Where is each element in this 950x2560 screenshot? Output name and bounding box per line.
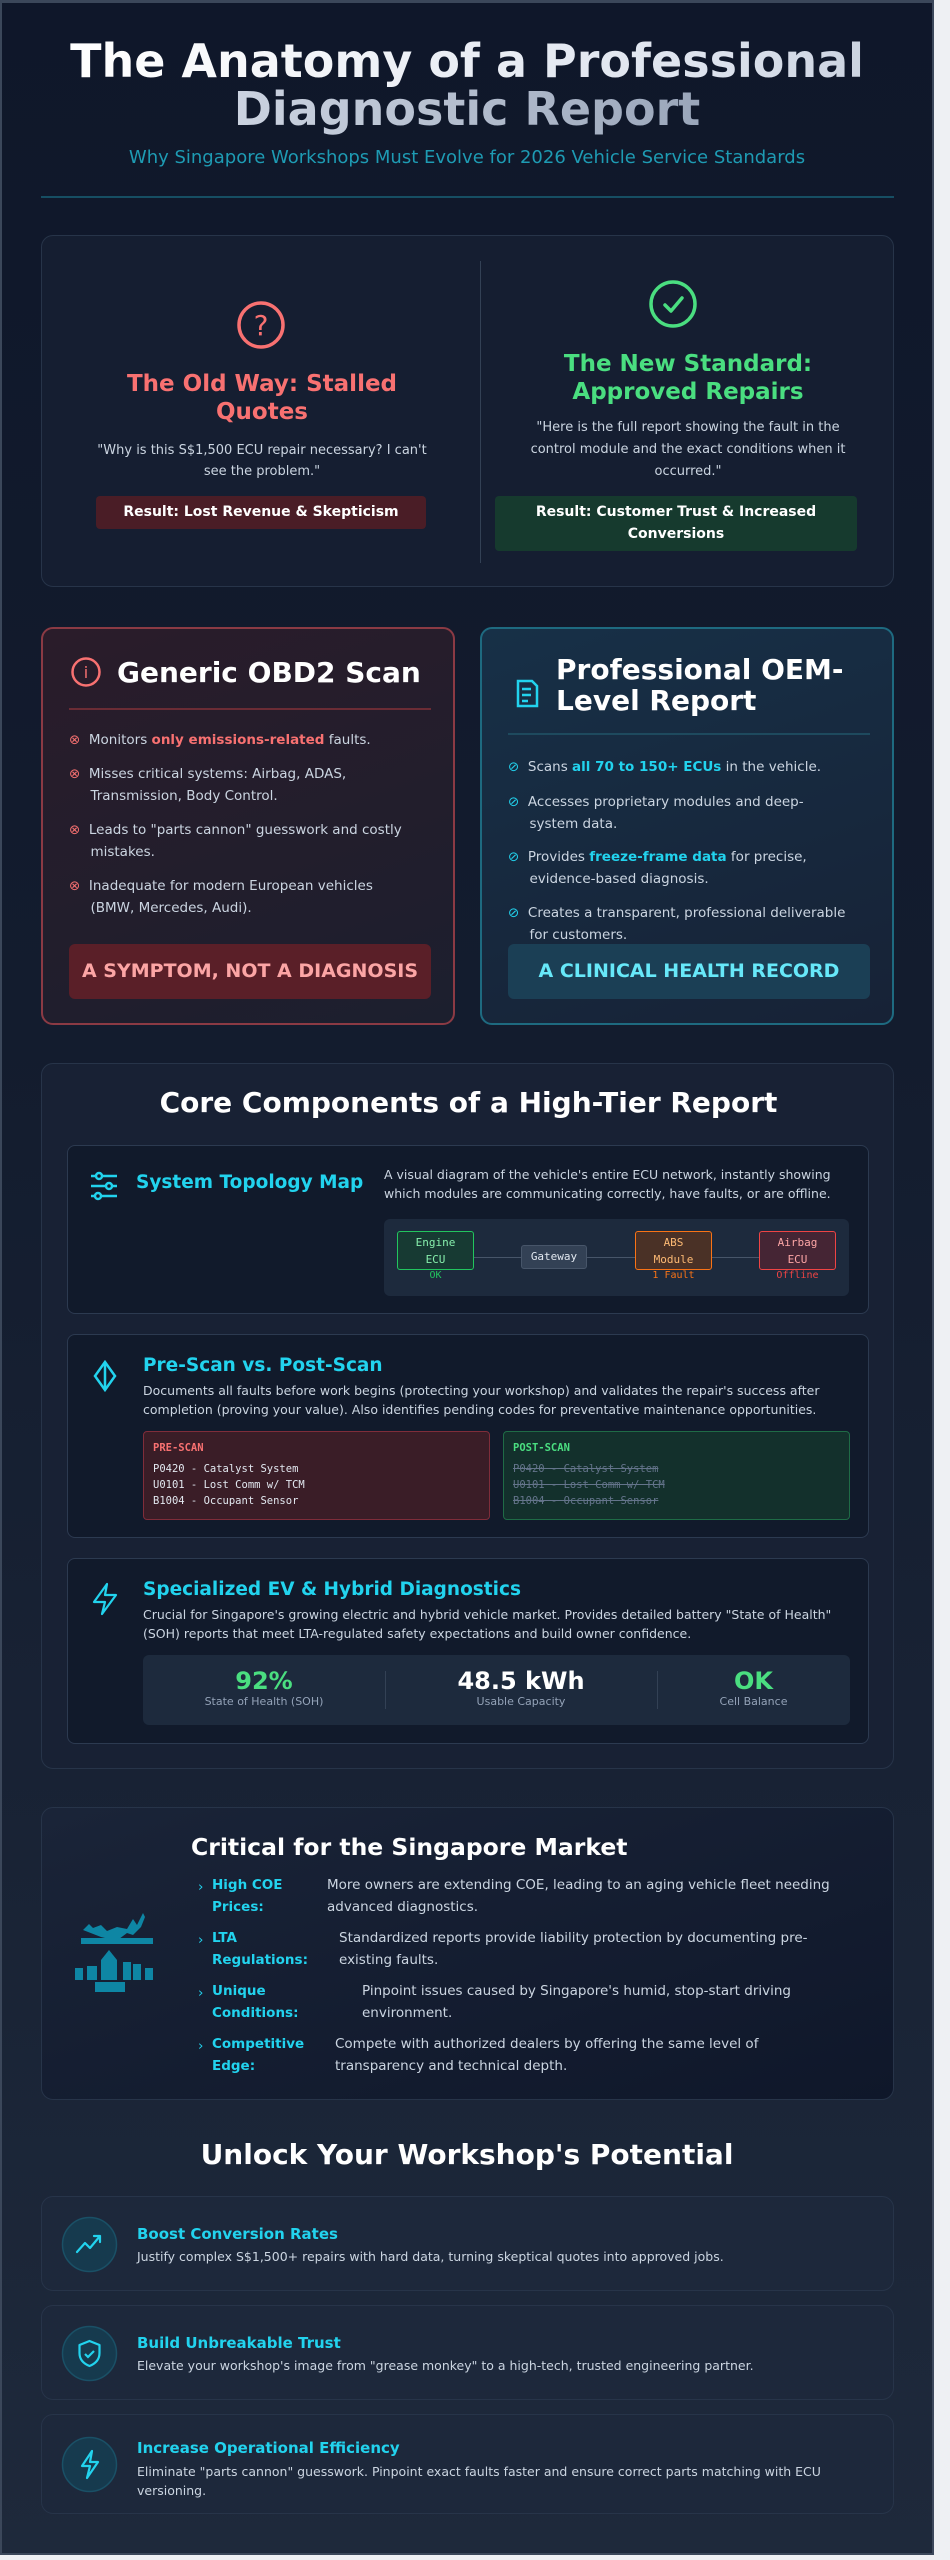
new standard column [495,280,857,551]
bullet list: capabilities: evidence-based diagnosis. [529,871,709,887]
stat: cell balance: Cell Balance [720,1695,787,1708]
item: unique conditions: Pinpoint issues caused by Singapore's humid, stop-start driving environment. [362,1983,791,2021]
card: system topology map [67,1145,869,1314]
diagram: ECU network: 1 Fault [652,1270,695,1281]
diagram: ECU network: OK [429,1270,442,1281]
box: post-scan codes: POST-SCAN [513,1442,570,1454]
description: topology: A visual diagram of the vehicle's entire ECU network, instantly showing which modules are communicating correctly, have faults, or are offline. [384,1167,831,1201]
stat: SOH: 92% [235,1667,293,1695]
icon: sliders [91,1172,117,1200]
title: topology: System Topology Map [136,1172,363,1193]
heading: old way: The Old Way: Stalled [127,371,397,397]
title: The Anatomy of a Professional [70,34,864,88]
card: pre-scan vs post-scan [67,1334,869,1538]
item: LTA regulations: Standardized reports provide liability protection by documenting pre-existing faults. [339,1930,808,1968]
bullet list: limitations: Transmission, Body Control. [90,788,278,804]
bullet list: capabilities [508,759,845,943]
title [70,34,864,136]
diagram: ECU network [384,1219,849,1296]
panel: old vs new comparison [41,235,894,587]
bullet list: limitations: ⊗ Inadequate for modern European vehicles [69,878,373,894]
box: post-scan codes: P0420 - Catalyst System [513,1463,658,1475]
icon: lightning [62,2436,118,2492]
node: engine ECU: Engine [416,1236,455,1249]
title: trust: Build Unbreakable Trust [137,2334,341,2352]
badge: lost revenue [96,496,426,529]
bullet list: limitations [69,732,402,916]
card: boost conversion [41,2196,894,2291]
item: LTA regulations: LTA [212,1930,237,1946]
bullet list: limitations: (BMW, Mercedes, Audi). [90,900,252,916]
box: post-scan codes: U0101 - Lost Comm w/ TCM [513,1479,665,1491]
icon: check [649,280,697,328]
box: pre-scan codes [143,1431,490,1520]
node: gateway: Gateway [531,1250,577,1263]
heading: new standard: Approved Repairs [572,379,804,405]
badge: clinical health record [508,944,870,999]
heading: new standard: The New Standard: [564,351,812,377]
item: unique conditions: Conditions: [212,2005,298,2021]
item: competitive edge: › [198,2038,203,2054]
bullet list: capabilities: ⊘ Accesses proprietary modules and deep- [508,794,804,810]
description: EV: Crucial for Singapore's growing electric and hybrid vehicle market. Provides detailed battery "State of Health" (SOH) reports that meet LTA-regulated safety expectations and build owner confidence. [143,1607,831,1641]
title: Diagnostic Report [234,82,700,136]
heading: Singapore market: Critical for the Singapore Market [191,1833,628,1861]
item: competitive edge: Compete with authorized dealers by offering the same level of transparency and technical depth. [335,2036,758,2074]
bullet list: limitations: ⊗ Leads to "parts cannon" guesswork and costly [69,822,402,838]
heading: OEM report [556,653,844,717]
heading: old way [127,371,397,425]
badge: symptom not diagnosis: A SYMPTOM, NOT A DIAGNOSIS [82,960,418,982]
heading: new standard [564,351,812,405]
item: unique conditions: › [198,1985,203,2001]
title: pre vs post: Pre-Scan vs. Post-Scan [143,1355,383,1376]
description: trust: Elevate your workshop's image from "grease monkey" to a high-tech, trusted engineering partner. [137,2358,754,2373]
box: pre-scan codes: PRE-SCAN [153,1442,204,1454]
quote: new standard: "Here is the full report showing the fault in the control module and the exact conditions when it occurred." [531,420,845,479]
bullet list: limitations: ⊗ Misses critical systems: Airbag, ADAS, [69,766,346,782]
card: operational efficiency [41,2414,894,2514]
icon: trending up [62,2216,118,2272]
node: ABS module: ABS [664,1236,683,1249]
title: efficiency: Increase Operational Efficiency [137,2439,400,2457]
icon: question mark: ? [254,309,268,342]
badge: customer trust [495,496,857,551]
bullet list: limitations: mistakes. [90,844,155,860]
stat: SOH [205,1667,323,1708]
icon: clipboard [516,680,538,708]
stats: battery [143,1655,850,1725]
panel: Singapore market [41,1807,894,2100]
quote: old way: "Why is this S$1,500 ECU repair necessary? I can't see the problem." [97,443,427,479]
stat: cell balance: OK [734,1667,773,1695]
box: pre-scan codes: U0101 - Lost Comm w/ TCM [153,1479,305,1491]
node: engine ECU: ECU [426,1253,445,1266]
node: gateway [521,1245,587,1269]
description: pre vs post: Documents all faults before work begins (protecting your workshop) and validates the repair's success after completion (proving your value). Also identifies pending codes for preventative maintenance opportunities. [143,1383,820,1417]
item: high COE: Prices: [212,1899,264,1915]
heading: unlock potential: Unlock Your Workshop's Potential [201,2138,733,2171]
box: pre-scan codes: B1004 - Occupant Sensor [153,1495,298,1507]
item: LTA regulations: › [198,1932,203,1948]
diagram: ECU network: Offline [776,1270,819,1281]
stat: capacity [457,1667,585,1708]
description: efficiency: Eliminate "parts cannon" guesswork. Pinpoint exact faults faster and ensure correct parts matching with ECU versioning. [137,2464,821,2498]
stat: cell balance [720,1667,787,1708]
icon: diamond [94,1360,116,1392]
node: ABS module [635,1231,712,1270]
icon: question mark [237,301,285,349]
description: boost: Justify complex S$1,500+ repairs with hard data, turning skeptical quotes into approved jobs. [137,2249,724,2264]
box: post-scan codes: B1004 - Occupant Sensor [513,1495,658,1507]
icon: Singapore skyline [75,1913,153,1992]
item: high COE: More owners are extending COE, leading to an aging vehicle fleet needing advanced diagnostics. [327,1877,830,1915]
item: competitive edge: Edge: [212,2058,255,2074]
bullet list: capabilities: for customers. [529,927,627,943]
bullet list: capabilities: ⊘ Scans all 70 to 150+ ECUs in the vehicle. [508,759,821,775]
panel: professional OEM report [480,627,894,1025]
card: EV and hybrid diagnostics [67,1558,869,1744]
bullet list: capabilities: ⊘ Creates a transparent, professional deliverable [508,905,845,921]
stat: capacity: 48.5 kWh [457,1667,585,1695]
node: engine ECU [397,1231,474,1270]
badge: lost revenue: Result: Lost Revenue & Skepticism [123,504,399,520]
panel: core components [41,1063,894,1769]
subtitle: Why Singapore Workshops Must Evolve for 2026 Vehicle Service Standards [129,147,805,168]
heading: old way: Quotes [216,399,308,425]
box: pre-scan codes: P0420 - Catalyst System [153,1463,298,1475]
stat: SOH: State of Health (SOH) [205,1695,323,1708]
bullet list: capabilities: system data. [529,816,617,832]
heading: generic OBD2: Generic OBD2 Scan [117,656,421,689]
node: airbag ECU [759,1231,836,1270]
box: post-scan codes [503,1431,850,1520]
stat: capacity: Usable Capacity [477,1695,565,1708]
heading: core components: Core Components of a High-Tier Report [160,1086,777,1119]
badge: clinical health record: A CLINICAL HEALTH RECORD [539,960,839,982]
item: competitive edge: Competitive [212,2036,304,2052]
old way column [96,301,427,529]
icon: info [71,657,101,687]
icon: lightning [92,1582,118,1616]
badge: customer trust: Result: Customer Trust & Increased [536,504,816,520]
bullet list: capabilities: ⊘ Provides freeze-frame data for precise, [508,849,807,865]
item: LTA regulations: Regulations: [212,1952,308,1968]
heading: OEM report: Professional OEM- [556,653,844,686]
item: high COE: High COE [212,1877,283,1893]
panel: generic OBD2 scan [41,627,455,1025]
title: boost: Boost Conversion Rates [137,2225,338,2243]
node: airbag ECU: ECU [788,1253,807,1266]
node: airbag ECU: Airbag [778,1236,817,1249]
node: ABS module: Module [654,1253,693,1266]
heading: OEM report: Level Report [556,684,756,717]
badge: customer trust: Conversions [628,526,724,542]
title: EV diagnostics: Specialized EV & Hybrid Diagnostics [143,1579,521,1600]
badge: symptom not diagnosis [69,944,431,999]
icon: info: i [84,663,88,682]
item: unique conditions: Unique [212,1983,266,1999]
item: high COE: › [198,1879,203,1895]
icon: shield [62,2326,118,2382]
card: build trust [41,2305,894,2400]
bullet list: limitations: ⊗ Monitors only emissions-related faults. [69,732,371,748]
